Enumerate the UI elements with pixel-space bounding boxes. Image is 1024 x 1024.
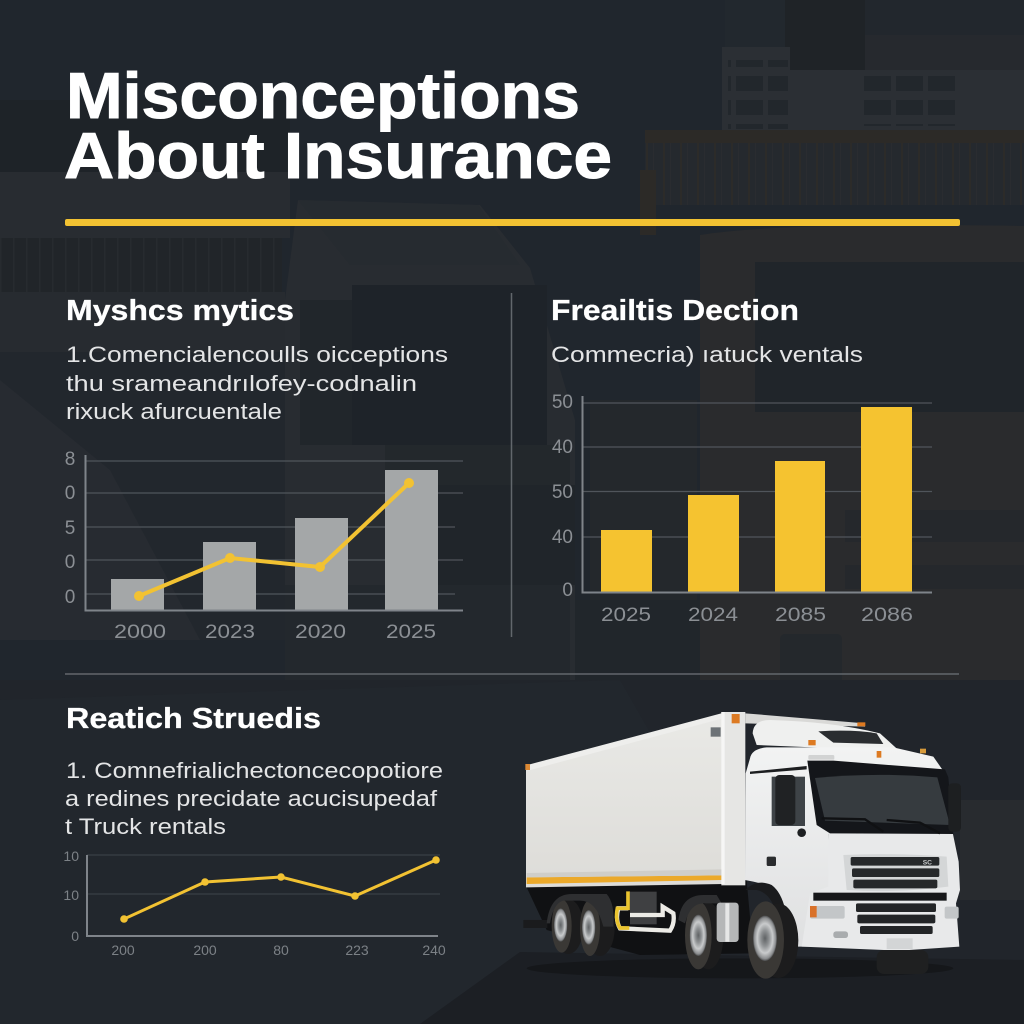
chart: grey bars with yellow line: 2000 (114, 622, 166, 643)
front bumper (813, 893, 947, 901)
vertical divider (510, 293, 512, 637)
chart: yellow bars: 2085 (775, 605, 826, 626)
ground shadow (527, 958, 953, 978)
cab (745, 720, 961, 951)
background: ground (0, 680, 1024, 1024)
background: left building (0, 100, 290, 640)
chart: yellow bars: 0 (562, 580, 573, 601)
yellow title rule (65, 219, 960, 226)
headlights (810, 906, 845, 919)
panel: reality (551, 295, 932, 626)
text block: myths: thu sramеandrılofey-codnalin (66, 371, 417, 396)
chart: yellow bars: 2024 (688, 605, 738, 626)
heading: reality: Freailtis Dection (551, 295, 799, 327)
horizontal divider (65, 673, 959, 675)
roof fairing (753, 720, 898, 750)
cab: SC (923, 859, 932, 866)
chart: yellow line: 80 (273, 942, 289, 958)
chart: yellow bars (552, 392, 932, 626)
chart: yellow bars: 40 (552, 437, 573, 458)
text block: research: t Truck rentals (65, 814, 226, 839)
chart: yellow bars: 40 (552, 527, 573, 548)
chart: grey bars with yellow line: 0 (65, 587, 75, 608)
upper grille (843, 854, 948, 891)
chart: grey bars with yellow line: 2025 (386, 622, 436, 643)
chart: grey bars with yellow line: 0 (65, 483, 75, 504)
background: right ghost truck (575, 225, 1024, 686)
title: About Insurance (64, 119, 612, 192)
chart: yellow line (63, 848, 446, 958)
cab side (745, 747, 945, 947)
chart: grey bars with yellow line: 2023 (205, 622, 255, 643)
chart: yellow line: 0 (71, 928, 79, 944)
text block: research: 1. Comnefrialichectoncecopotiore (66, 758, 443, 783)
chart: yellow bars: 50 (552, 482, 573, 503)
title (64, 59, 612, 192)
rear wheels (547, 894, 723, 969)
text block: research (65, 758, 443, 839)
text block: myths: rixuck afurcuentale (66, 399, 282, 424)
chart: yellow line: 240 (422, 942, 446, 958)
chart: yellow line: 223 (345, 942, 369, 958)
cargo box (525, 712, 865, 887)
front wheels (747, 901, 928, 979)
text block: myths (66, 342, 448, 424)
windscreen (807, 761, 953, 834)
chart: yellow line: 10 (63, 848, 79, 864)
chart: yellow bars: 2086 (861, 605, 913, 626)
text block: reality: Commecria) ıatuck ventals (551, 342, 863, 367)
chart: grey bars with yellow line: 5 (65, 518, 75, 539)
title: Misconceptions (66, 59, 580, 132)
chart: yellow line: 200 (111, 942, 135, 958)
panel: myths (65, 295, 463, 643)
chart: grey bars with yellow line (65, 449, 463, 643)
text block: research: a redines precidate acucisupedaf (65, 786, 438, 811)
cab front (802, 833, 960, 951)
illustration: white box truck (523, 712, 961, 979)
chart: grey bars with yellow line: 2020 (295, 622, 346, 643)
background: centre ghost truck (285, 200, 575, 680)
chart: grey bars with yellow line: 0 (65, 552, 75, 573)
chart: yellow bars: 2025 (601, 605, 651, 626)
chassis (527, 881, 753, 955)
heading: myths: Myshcs mytics (66, 295, 294, 327)
side step and tank (617, 891, 739, 942)
chart: yellow bars: 50 (552, 392, 573, 413)
background: right building (640, 0, 1024, 235)
chart: yellow line: 10 (63, 887, 79, 903)
chart: yellow line: 200 (193, 942, 217, 958)
panel: research studies (63, 703, 446, 958)
chart: grey bars with yellow line: 8 (65, 449, 75, 470)
heading: research: Reatich Struedis (66, 703, 321, 735)
mirrors (775, 775, 795, 825)
text block: myths: 1.Comencialencoulls oicceptions (66, 342, 448, 367)
